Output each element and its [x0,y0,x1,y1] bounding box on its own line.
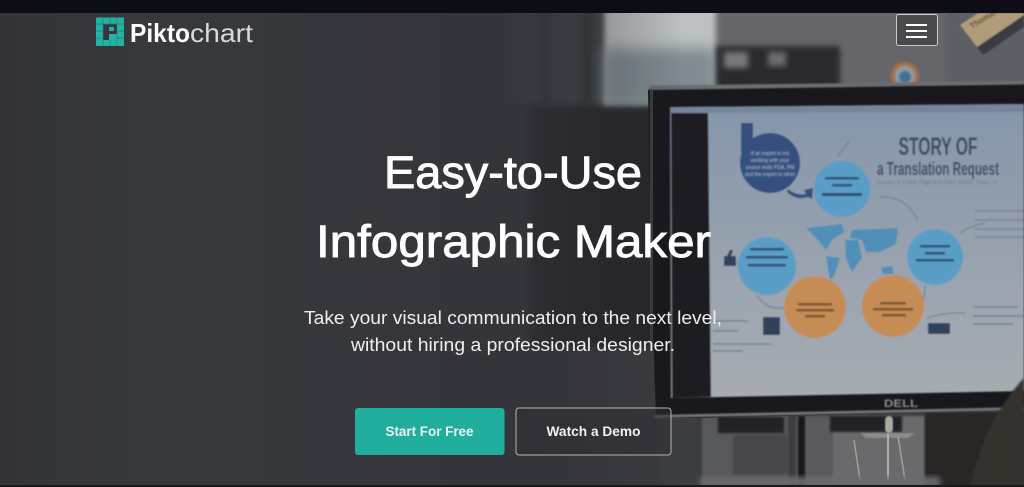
screen: speech bubble: source texts PDA, PM [746,165,794,171]
photo: sticky note: Thomas [968,7,1000,31]
screen: speech bubble: working with your [751,158,790,164]
headline [316,147,711,267]
screen: blue circles [738,161,963,295]
photo: monitor stand and desk [660,410,1024,487]
screen: speech bubble: If an expert is not [751,151,790,157]
bottom black edge [0,485,1024,487]
photo: colourful mug on wall [891,62,919,90]
screen: world map [806,224,898,280]
monitor brand label: DELL [884,398,918,410]
menu button [896,14,938,46]
subheading [304,308,722,355]
button: watch a demo [516,408,671,455]
screen: story heading [876,133,999,186]
button: start for free [355,408,504,455]
screen: orange circles [784,275,924,338]
screen: speech bubble [740,123,813,199]
screen: small icons [724,250,950,335]
logo: chart [190,18,254,48]
logo [96,17,254,48]
headline: Infographic Maker [316,216,711,267]
screen: side captions [713,210,1024,352]
screen: story heading: Journey of a Web Page from Start, March, Times, Fr [876,180,998,186]
logo icon [96,17,124,46]
left dark overlay [0,13,720,485]
monitor screen [670,104,1024,398]
screen: connector strokes [757,140,985,320]
subheading: without hiring a professional designer. [350,335,675,355]
button: start for free: Start For Free [386,423,474,439]
top black bar [0,0,1024,13]
screen: speech bubble: and the expert to other [745,172,795,178]
photo: sticky note [960,7,1024,55]
logo wordmark: Pikto [130,18,190,48]
photo: monitor [648,81,1024,418]
photo: person in foreground [970,378,1024,487]
screen: story heading: STORY OF [898,133,978,161]
subheading: Take your visual communication to the next level, [304,308,722,328]
photo: blurred office wall [500,0,1024,346]
button: watch a demo: Watch a Demo [546,423,640,439]
headline: Easy-to-Use [384,147,642,198]
